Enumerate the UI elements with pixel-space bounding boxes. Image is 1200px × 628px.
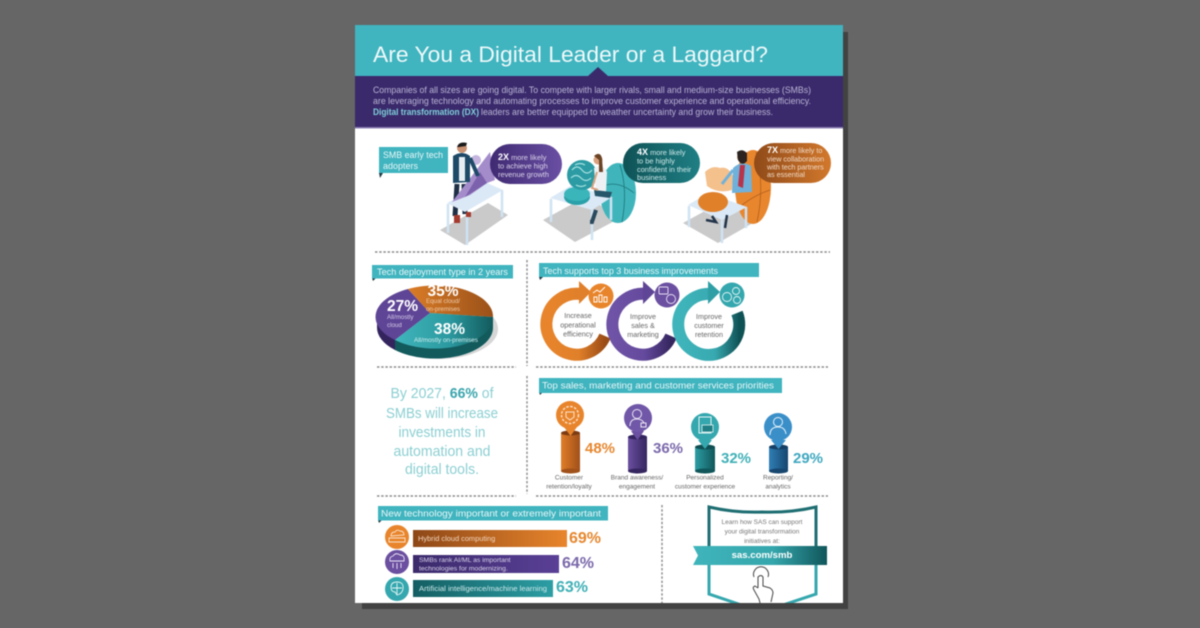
pie labels: 35%	[427, 283, 459, 300]
callout: 2X: to achieve high	[498, 162, 548, 170]
heading: SMB early tech adopters: adopters	[383, 161, 419, 171]
CTA text: Learn how SAS can support	[722, 519, 803, 526]
callout: 7X	[754, 143, 831, 183]
heading: new technology: New technology important or extremely important	[381, 508, 601, 520]
column: customer retention: 48%	[585, 440, 615, 457]
callout: 2X: revenue growth	[498, 170, 549, 179]
illustration: man with chart at table	[440, 142, 508, 245]
bar: AI and machine learning: 63%	[556, 579, 588, 596]
callout: 2X	[490, 144, 562, 184]
bar: hybrid cloud	[385, 525, 601, 549]
title: Are You a Digital Leader or a Laggard?	[373, 42, 768, 67]
cycle: operational efficiency: Increase	[564, 311, 592, 320]
callout: 2X: 2X more likely	[498, 152, 547, 162]
intro band	[355, 67, 843, 128]
cycle: customer retention: Improve	[696, 312, 722, 321]
text block: by 2027 stat: investments in	[398, 425, 486, 441]
bar: AI and machine learning: Artificial intelligence/machine learning	[419, 586, 547, 593]
pie labels: All/mostly on-premises	[414, 337, 478, 344]
call to action badge	[693, 507, 827, 612]
heading: SMB early tech adopters: SMB early tech	[383, 150, 443, 160]
intro text: Digital transformation (DX)	[373, 107, 479, 117]
icon: chart	[588, 284, 614, 308]
column: reporting analytics: analytics	[765, 484, 791, 490]
cycle: sales and marketing	[612, 281, 680, 355]
column: customer retention: retention/loyalty	[546, 484, 593, 490]
bar: AI/ML	[385, 550, 594, 574]
callout: 7X: view collaboration	[767, 154, 824, 164]
text block: by 2027 stat: By 2027, 66% of	[390, 386, 494, 402]
text block: by 2027 stat: digital tools.	[405, 462, 479, 478]
callout: 7X: as essential	[767, 170, 805, 179]
heading: SMB early tech adopters	[379, 147, 448, 178]
icon: customers	[720, 282, 744, 308]
pie labels: Equal cloud/	[426, 298, 460, 305]
column: customer retention	[546, 401, 615, 490]
pie labels: 27%	[387, 298, 418, 315]
column: brand awareness: Brand awareness/	[611, 474, 663, 482]
heading: tech supports	[539, 263, 759, 280]
cycle: customer retention: customer	[694, 321, 724, 330]
column: brand awareness: 36%	[653, 440, 683, 457]
cycle: operational efficiency: operational	[560, 320, 596, 330]
text block: by 2027 stat: SMBs will increase	[386, 406, 498, 422]
panel: new technology	[378, 506, 608, 601]
bar: AI/ML: technologies for modernizing.	[419, 566, 508, 572]
drop shadow of page	[362, 32, 848, 609]
callout: 7X: 7X more likely to	[767, 145, 822, 155]
cycle: sales and marketing: marketing	[627, 330, 659, 339]
heading: tech deployment: Tech deployment type in 2 years	[377, 266, 508, 277]
panel: tech deployment type	[372, 265, 513, 359]
cycle: operational efficiency	[546, 281, 614, 355]
heading: priorities: Top sales, marketing and customer services priorities	[542, 380, 775, 390]
callout: 4X: 4X more likely	[637, 147, 686, 157]
column: personalized customer experience: Personalized	[686, 474, 724, 482]
heading: new technology	[378, 506, 608, 523]
callout: 4X	[623, 143, 700, 183]
pie labels	[387, 283, 478, 344]
bar: AI/ML: 64%	[562, 555, 594, 572]
panel: priorities	[539, 378, 823, 490]
column: personalized customer experience: 32%	[721, 450, 751, 467]
cycle: sales and marketing: Improve	[630, 312, 656, 321]
title banner	[355, 25, 843, 76]
bar: hybrid cloud: 69%	[569, 530, 601, 547]
column: personalized customer experience: customer experience	[675, 484, 736, 490]
column: reporting analytics	[763, 413, 823, 490]
callout: 7X: with tech partners	[766, 162, 824, 172]
ribbon: sas.com/smb	[732, 550, 793, 561]
bar: AI and machine learning	[385, 577, 588, 601]
cycle: customer retention	[678, 281, 744, 355]
text block: by 2027 stat: automation and	[394, 444, 490, 460]
pie chart	[376, 283, 498, 359]
cycle: sales and marketing: sales &	[631, 321, 655, 330]
icon: pointing hand	[753, 567, 773, 603]
pie labels: All/mostly	[387, 314, 414, 321]
intro text: Companies of all sizes are going digital. To compete with larger rivals, small and medium-size businesses (SMBs)	[373, 85, 811, 95]
pie labels: cloud	[387, 322, 402, 329]
heading: tech deployment	[372, 265, 513, 281]
CTA text	[722, 519, 803, 545]
cycle: operational efficiency: efficiency	[563, 330, 593, 338]
bar: hybrid cloud: Hybrid cloud computing	[418, 534, 495, 543]
bar: AI/ML: SMBs rank AI/ML as important	[419, 557, 511, 564]
cycle: customer retention: retention	[695, 330, 723, 339]
pie labels: on-premises	[426, 306, 460, 313]
icon: people talking	[654, 282, 680, 308]
infographic page	[355, 25, 843, 612]
text block: by 2027 stat	[386, 386, 498, 478]
intro text: leaders are better equipped to weather uncertainty and grow their business.	[481, 107, 773, 117]
heading: tech supports: Tech supports top 3 business improvements	[543, 266, 718, 276]
illustration: woman with brain sphere	[543, 154, 636, 242]
column: brand awareness: engagement	[619, 484, 655, 490]
intro text	[373, 85, 811, 117]
CTA text: initiatives at:	[744, 538, 780, 545]
intro text: are leveraging technology and automating processes to improve customer experience and operational efficiency.	[373, 96, 811, 106]
column: personalized customer experience	[675, 413, 751, 490]
callout: 4X: business	[637, 173, 666, 182]
panel: tech supports business improvements	[539, 263, 759, 355]
callout: 4X: confident in their	[637, 165, 692, 174]
panel: SMB early tech adopters	[379, 142, 831, 245]
heading: priorities	[539, 378, 782, 395]
illustration: man with bean bag	[683, 150, 771, 243]
callout: 4X: to be highly	[637, 156, 675, 166]
pie labels: 38%	[434, 321, 465, 338]
column: brand awareness	[611, 404, 683, 490]
column: reporting analytics: 29%	[793, 450, 823, 467]
column: reporting analytics: Reporting/	[763, 474, 793, 482]
column: customer retention: Customer	[555, 474, 584, 482]
CTA text: your digital transformation	[725, 528, 800, 536]
